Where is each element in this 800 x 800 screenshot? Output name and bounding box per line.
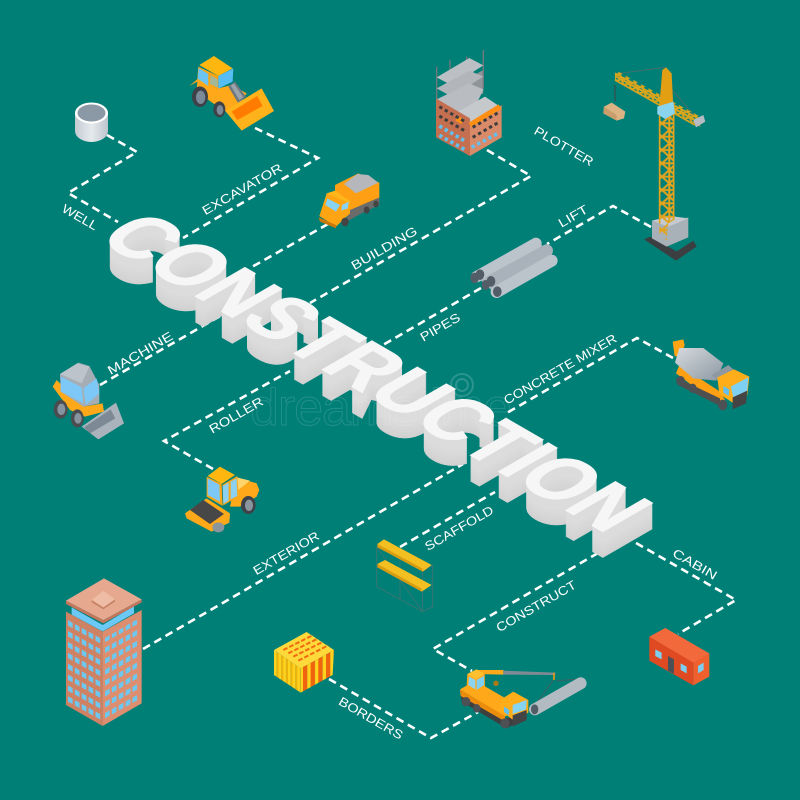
label: cabin: CABIN bbox=[670, 546, 719, 583]
title: CONSTRUCTION: CONSTRUCTION bbox=[80, 201, 672, 544]
icon: scaffold bbox=[377, 539, 433, 612]
icon: cabin bbox=[649, 628, 709, 685]
connector: borders bbox=[329, 679, 478, 738]
label: construct: CONSTRUCT bbox=[494, 578, 579, 635]
icon: building under construction bbox=[436, 50, 502, 156]
connector: concrete mixer bbox=[505, 338, 673, 414]
icon: well bbox=[75, 102, 108, 142]
label: roller: ROLLER bbox=[207, 394, 266, 436]
icon: crane truck bbox=[460, 669, 582, 728]
label: pipes: PIPES bbox=[418, 310, 463, 344]
label: lift: LIFT bbox=[556, 202, 591, 230]
connector: construct bbox=[433, 553, 598, 671]
label: excavator: EXCAVATOR bbox=[200, 161, 285, 218]
connector: excavator bbox=[183, 128, 318, 238]
connector: machine bbox=[100, 315, 222, 385]
watermark spiral bbox=[451, 374, 473, 396]
label: scaffold: SCAFFOLD bbox=[422, 503, 496, 554]
connector: building bbox=[310, 150, 531, 303]
icon: excavator bbox=[189, 56, 274, 131]
label: well: WELL bbox=[59, 202, 100, 233]
icon: skid steer machine bbox=[53, 363, 124, 439]
icon: tower crane bbox=[603, 67, 705, 261]
icon: tall building bbox=[66, 578, 142, 726]
watermark text: dreamstime bbox=[250, 379, 512, 437]
label: exterior: EXTERIOR bbox=[251, 529, 322, 578]
connector: lift bbox=[547, 206, 651, 244]
connector: roller bbox=[164, 371, 290, 469]
label: plotter: PLOTTER bbox=[532, 124, 596, 169]
connector: machine truck bbox=[250, 224, 328, 268]
icon: pipes bbox=[470, 238, 557, 297]
connector: exterior bbox=[143, 464, 463, 649]
label: concrete mixer: CONCRETE MIXER bbox=[501, 331, 619, 407]
connector: pipes bbox=[383, 288, 481, 345]
icon: roller bbox=[185, 467, 259, 532]
icon: concrete mixer bbox=[673, 339, 749, 410]
label: borders: BORDERS bbox=[336, 694, 405, 742]
connector: cabin bbox=[636, 543, 736, 634]
connector: scaffold bbox=[400, 492, 495, 547]
icon: dump truck bbox=[319, 173, 379, 228]
connector: well bbox=[68, 135, 137, 222]
label: building: BUILDING bbox=[349, 224, 420, 273]
icon: bricks bbox=[274, 632, 334, 693]
label: machine: MACHINE bbox=[105, 329, 175, 378]
